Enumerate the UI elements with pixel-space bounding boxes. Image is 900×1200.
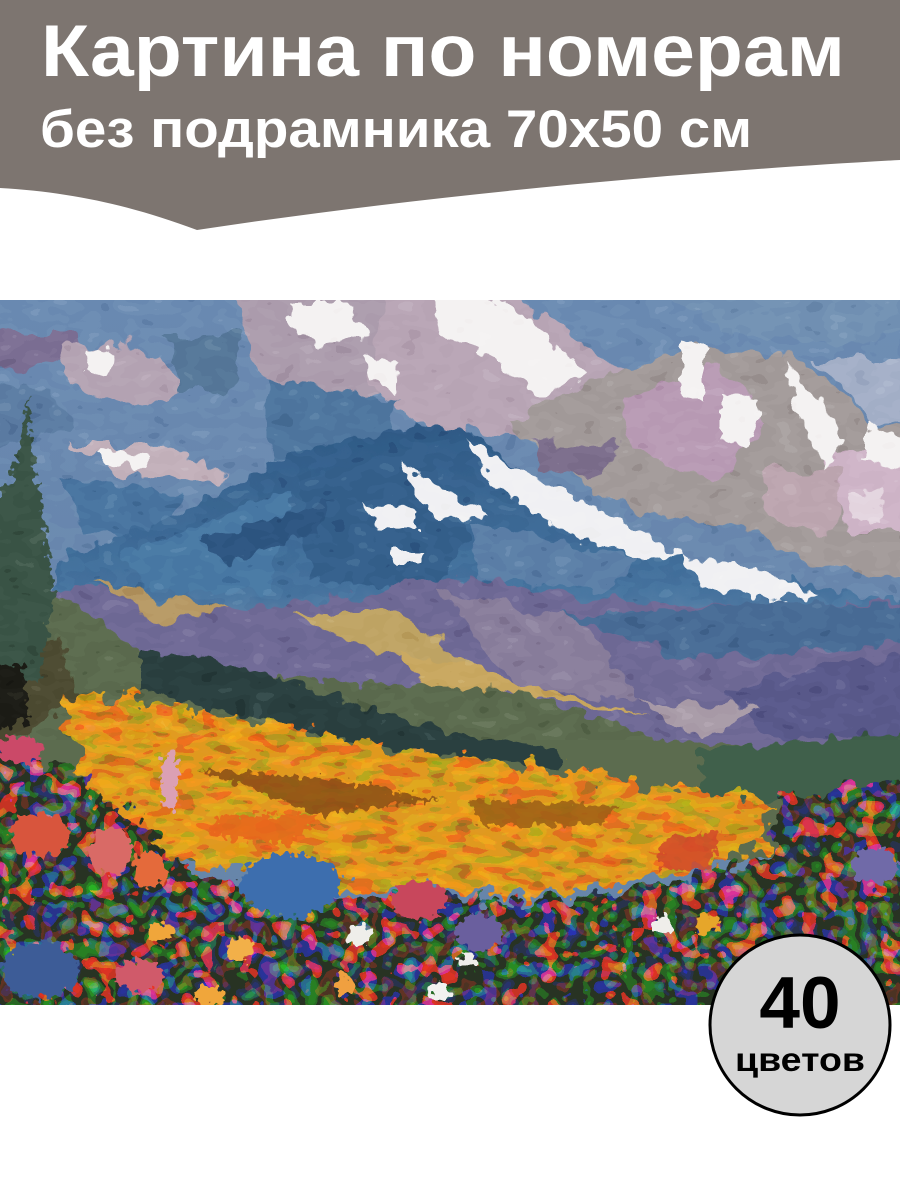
- green slope and treeline: [0, 580, 900, 860]
- painting: mountain landscape: [0, 280, 900, 1005]
- snow-capped mountain: [52, 422, 900, 611]
- painterly texture overlay: [0, 300, 900, 740]
- clouds: [0, 280, 900, 585]
- snow: [365, 440, 820, 600]
- golden flower meadow: [58, 686, 778, 906]
- pine tree: [0, 395, 54, 740]
- badge circle: [710, 935, 890, 1115]
- title: Картина по номерам: [41, 11, 845, 92]
- purple foothills: [51, 574, 900, 750]
- subtitle: без подрамника 70х50 см: [40, 100, 752, 159]
- wildflower field: [0, 750, 900, 1005]
- colour count badge: [710, 935, 890, 1115]
- wildflower blooms: [0, 736, 899, 1005]
- cloud highlights: [85, 296, 900, 525]
- badge number: 40: [759, 963, 841, 1044]
- meadow brush strokes: [200, 770, 720, 870]
- sky: [0, 300, 900, 910]
- badge label: цветов: [735, 1041, 865, 1078]
- header banner: [0, 0, 900, 230]
